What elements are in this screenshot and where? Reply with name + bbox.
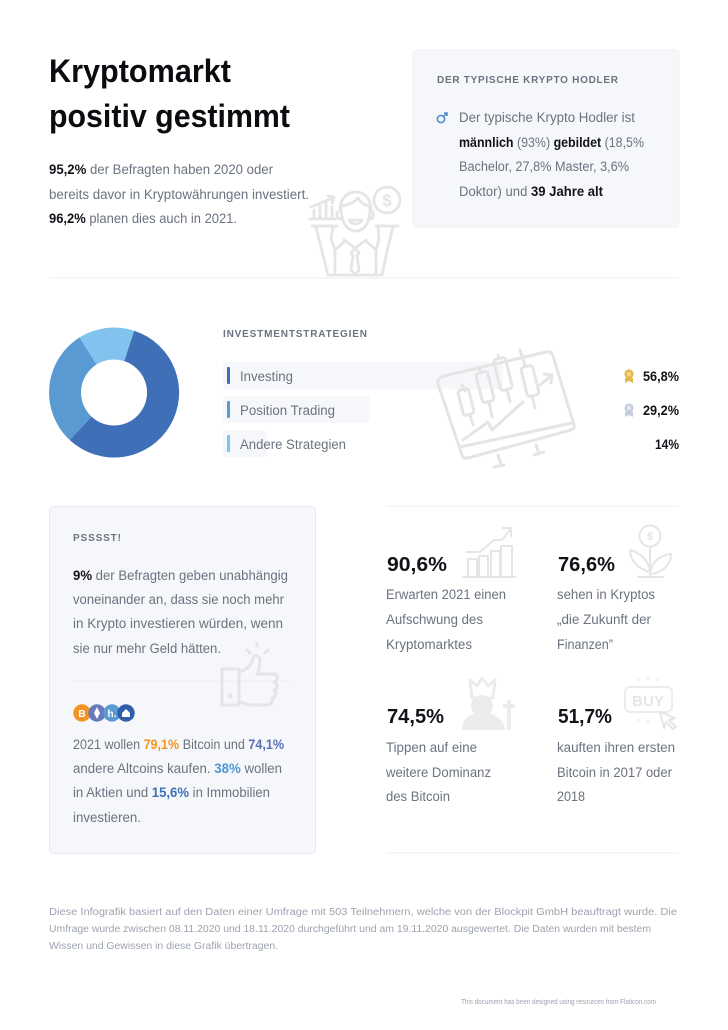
row: Investing: Investing [240,369,293,384]
stat: 74,5%: des Bitcoin [386,789,450,804]
psssst text: 9% der Befragten geben unabhängig [73,568,288,583]
hodler description: männlich (93%) gebildet (18,5% [459,135,644,150]
row: Position Trading [223,396,370,423]
icon: thumbs up [222,643,277,705]
stat: 76,6%: sehen in Kryptos [557,587,655,602]
hodler description: Bachelor, 27,8% Master, 3,6% [459,159,629,174]
row: Andere Strategien: Andere Strategien [240,437,346,452]
stat: 76,6%: Finanzen” [557,637,613,652]
icon: coin row: B [78,709,86,720]
panel heading: DER TYPISCHE KRYPTO HODLER [437,75,619,86]
stat: 74,5% [385,678,515,804]
icon: businessman with coin and chart [310,187,400,275]
footer note [49,907,677,952]
icon: male symbol [437,113,447,123]
stat: 90,6%: Aufschwung des [386,612,483,627]
footer note: Umfrage wurde zwischen 08.11.2020 und 18.11.2020 durchgeführt und am 19.11.2020 ausgewertet. Die Daten wurden mit bestem [49,924,651,935]
hodler description: Der typische Krypto Hodler ist [459,110,635,125]
hodler description [459,110,644,199]
stat: 76,6%: „die Zukunft der [557,612,652,627]
psssst text: in Krypto investieren würden, wenn [73,616,283,631]
donut chart [49,328,179,458]
psssst text [73,568,288,656]
icon: coin row: h. [108,709,117,720]
stat: 90,6% [386,528,515,652]
stat: 74,5%: Tippen auf eine [386,740,477,755]
icon: buy button: BUY [632,693,664,710]
plans text [73,737,284,825]
title [49,53,290,134]
attribution: This document has been designed using resources from Flaticon.com [461,999,656,1006]
icon: coin row [73,704,135,722]
other strategies value: 14% [655,437,679,452]
intro text: 96,2% planen dies auch in 2021. [49,211,237,226]
investing value with gold medal: 56,8% [643,369,679,384]
intro text: bereits davor in Kryptowährungen investiert. [49,187,309,202]
stat: 51,7% [557,678,676,804]
icon: king [462,678,515,730]
stat: 90,6%: Kryptomarktes [386,637,472,652]
stat: 51,7%: Bitcoin in 2017 oder [557,765,672,780]
title: Kryptomarkt [49,53,231,89]
icon: trading monitor [438,350,574,467]
stat: 90,6%: Erwarten 2021 einen [386,587,506,602]
stat: 74,5%: weitere Dominanz [385,765,491,780]
row: Investing [223,362,503,389]
intro text [49,162,309,226]
stat: 90,6%: 90,6% [387,553,447,576]
psssst text: sie nur mehr Geld hätten. [73,641,221,656]
intro text: 95,2% der Befragten haben 2020 oder [49,162,273,177]
position trading value with silver medal [624,403,679,418]
row: Andere Strategien [223,430,346,457]
plans text: 2021 wollen 79,1% Bitcoin und 74,1% [73,737,284,752]
stat: 76,6%: 76,6% [558,553,615,576]
panel heading: PSSSST! [73,533,121,544]
icon: growth chart [463,528,515,577]
plans text: investieren. [73,810,141,825]
panel: psssst [50,506,316,854]
psssst text: voneinander an, dass sie noch mehr [73,592,284,607]
panel: typical crypto hodler [413,50,679,227]
row: Position Trading: Position Trading [240,403,335,418]
heading: investment strategies: INVESTMENTSTRATEGIEN [223,329,367,340]
plans text: andere Altcoins kaufen. 38% wollen [73,761,282,776]
stat: 76,6% [557,526,671,652]
stat: 51,7%: 2018 [557,789,585,804]
plans text: in Aktien und 15,6% in Immobilien [73,785,270,800]
footer note: Diese Infografik basiert auf den Daten einer Umfrage mit 503 Teilnehmern, welche von der Blockpit GmbH beauftragt wurde. Die [49,907,677,918]
position trading value with silver medal: 29,2% [643,403,679,418]
hodler description: Doktor) und 39 Jahre alt [459,184,603,199]
footer note: Wissen und Gewissen in diese Grafik übertragen. [49,941,278,952]
icon: money plant: $ [647,531,653,543]
stat: 51,7%: 51,7% [558,705,612,728]
stat: 51,7%: kauften ihren ersten [557,740,675,755]
investing value with gold medal [624,369,679,384]
stat: 74,5%: 74,5% [387,705,444,728]
icon: businessman with coin and chart: $ [382,191,392,210]
title: positiv gestimmt [49,98,290,134]
